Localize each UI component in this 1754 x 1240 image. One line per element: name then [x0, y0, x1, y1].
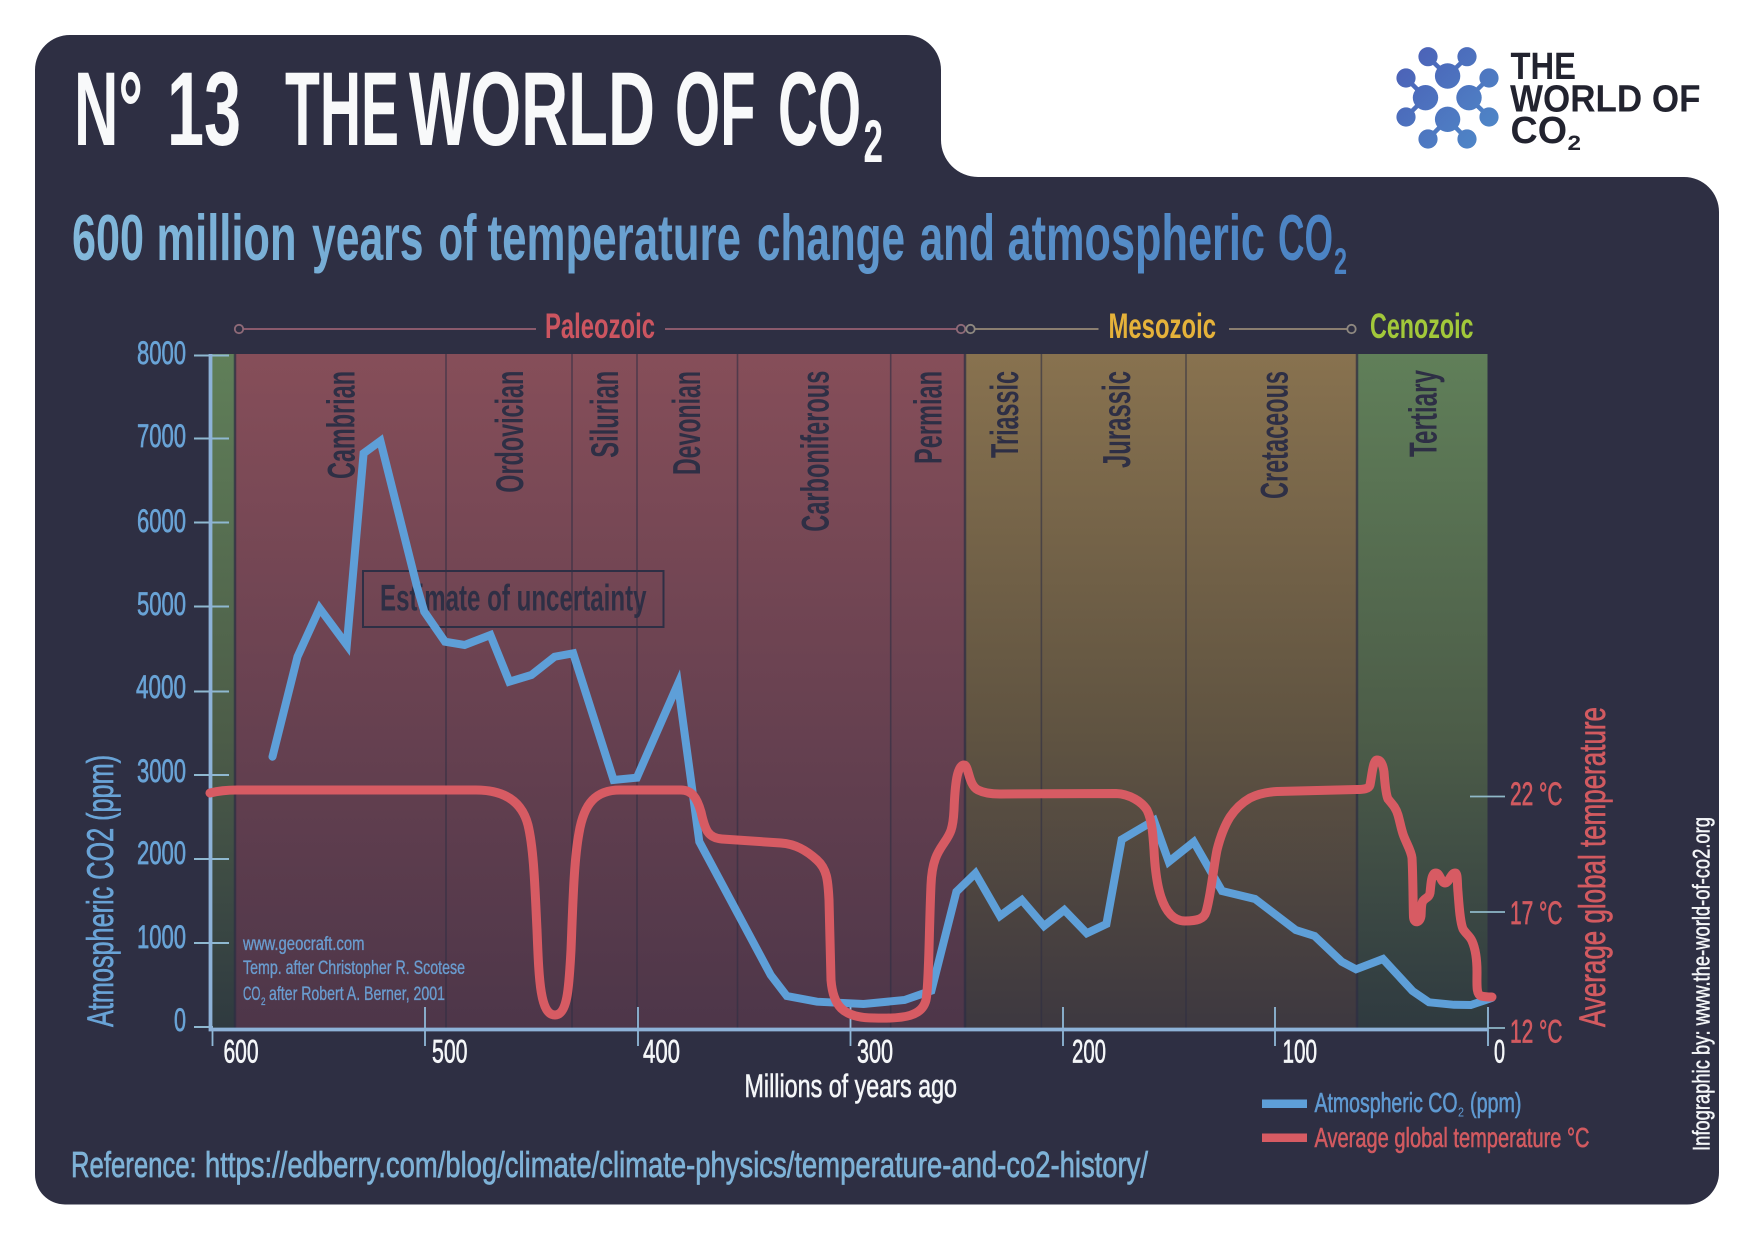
CO2 y-axis labels — [136, 335, 186, 1038]
subtitle: 2 — [1334, 241, 1347, 282]
title — [74, 51, 883, 175]
legend: temperature — [1262, 1122, 1590, 1153]
subtitle: atmospheric — [1008, 201, 1265, 274]
icon: molecule network — [1396, 47, 1499, 149]
temperature axis labels: 12 °C — [1510, 1014, 1562, 1050]
era header: Paleozoic: Paleozoic — [545, 307, 655, 346]
subtitle: change — [757, 201, 905, 274]
axes and ticks — [194, 354, 1505, 1046]
title: WORLD — [409, 51, 655, 168]
temperature axis title: Average global temperature — [1572, 707, 1613, 1027]
logo wordmark: WORLD OF — [1510, 78, 1700, 120]
infographic credit: Infographic by: www.the-world-of-co2.org — [1688, 817, 1716, 1151]
period labels: Jurassic — [1096, 371, 1139, 468]
logo wordmark — [1510, 46, 1700, 155]
title: 13 — [167, 51, 241, 168]
CO2 y-axis labels: 8000 — [137, 335, 186, 371]
x-axis labels: 500 — [432, 1034, 468, 1070]
title: N° — [74, 51, 143, 168]
subtitle: 600 — [72, 201, 144, 274]
legend: CO2: Atmospheric CO — [1314, 1087, 1458, 1118]
period labels: Carboniferous — [795, 371, 838, 532]
x-axis labels — [224, 1034, 1505, 1070]
source credits: 2 — [261, 996, 266, 1008]
period labels — [321, 370, 1446, 532]
line: atmospheric CO2 — [272, 441, 1492, 1005]
period labels: Devonian — [666, 371, 709, 475]
band: Paleozoic — [235, 354, 965, 1028]
CO2 y-axis labels: 2000 — [137, 835, 186, 871]
chart: geological period bands — [211, 354, 1488, 1028]
x-axis labels: 0 — [1494, 1034, 1505, 1070]
band: Mesozoic — [965, 354, 1357, 1028]
x-axis labels: 600 — [224, 1034, 258, 1070]
temperature axis labels: 17 °C — [1510, 895, 1562, 931]
era header: Paleozoic — [235, 307, 965, 346]
callout: estimate of uncertainty: Estimate of uncertainty — [380, 578, 647, 618]
subtitle — [72, 201, 1347, 282]
x-axis labels: 400 — [643, 1034, 680, 1070]
x-axis labels: 300 — [857, 1034, 893, 1070]
CO2 y-axis labels: 0 — [174, 1002, 186, 1038]
logo wordmark: THE — [1510, 46, 1576, 88]
period labels: Triassic — [984, 371, 1027, 458]
period labels: Tertiary — [1403, 370, 1446, 457]
era header: Mesozoic: Mesozoic — [1108, 307, 1216, 346]
CO2 y-axis labels: 7000 — [137, 418, 186, 454]
CO2 y-axis labels: 6000 — [137, 503, 186, 539]
source credits — [242, 934, 465, 1008]
legend: CO2: (ppm) — [1470, 1087, 1522, 1118]
subtitle: of — [438, 201, 477, 274]
band: Precambrian green sliver — [211, 354, 235, 1028]
logo: The World of CO2 — [1396, 46, 1700, 155]
legend — [1262, 1087, 1590, 1153]
subtitle: temperature — [488, 201, 741, 274]
reference URL: Reference: — [71, 1144, 197, 1185]
x-axis labels: 100 — [1282, 1034, 1317, 1070]
reference URL: https://edberry.com/blog/climate/climate-physics/temperature-and-co2-history/ — [205, 1144, 1148, 1185]
x-axis labels: 200 — [1072, 1034, 1106, 1070]
source credits: Temp. after Christopher R. Scotese — [243, 958, 465, 979]
source credits: after Robert A. Berner, 2001 — [269, 984, 445, 1005]
CO2 y-axis labels: 3000 — [137, 753, 186, 789]
temperature axis labels — [1510, 776, 1562, 1050]
logo wordmark: 2 — [1568, 132, 1581, 155]
CO2 y-axis labels: 4000 — [136, 669, 186, 705]
subtitle: CO — [1278, 201, 1333, 274]
CO2 y-axis labels: 1000 — [137, 919, 186, 955]
CO2 y-axis title: Atmospheric CO2 (ppm) — [80, 755, 121, 1027]
title: CO — [778, 51, 861, 168]
reference URL — [71, 1144, 1148, 1185]
temperature axis labels: 22 °C — [1510, 776, 1562, 812]
title: OF — [675, 51, 756, 168]
callout: estimate of uncertainty — [363, 571, 664, 627]
title: THE — [285, 51, 399, 168]
subtitle: million — [156, 201, 296, 274]
title: 2 — [864, 108, 883, 175]
era header: Mesozoic — [966, 307, 1356, 346]
legend: temperature: Average global temperature °C — [1314, 1122, 1590, 1153]
band: Cenozoic — [1357, 354, 1488, 1028]
line: average global temperature — [210, 760, 1492, 1018]
subtitle: years — [312, 201, 424, 274]
source credits: www.geocraft.com — [242, 934, 364, 955]
logo wordmark: CO — [1510, 110, 1567, 152]
CO2 y-axis labels: 5000 — [137, 586, 186, 622]
period labels: Cambrian — [321, 371, 364, 479]
period labels: Silurian — [584, 371, 627, 458]
x-axis title: Millions of years ago — [744, 1068, 957, 1104]
period labels: Permian — [907, 371, 950, 464]
source credits: CO — [243, 984, 260, 1005]
period labels: Cretaceous — [1254, 371, 1296, 499]
subtitle: and — [920, 201, 995, 274]
legend: CO2: 2 — [1458, 1104, 1464, 1120]
period labels: Ordovician — [489, 371, 532, 493]
era header: Cenozoic: Cenozoic — [1370, 307, 1474, 346]
